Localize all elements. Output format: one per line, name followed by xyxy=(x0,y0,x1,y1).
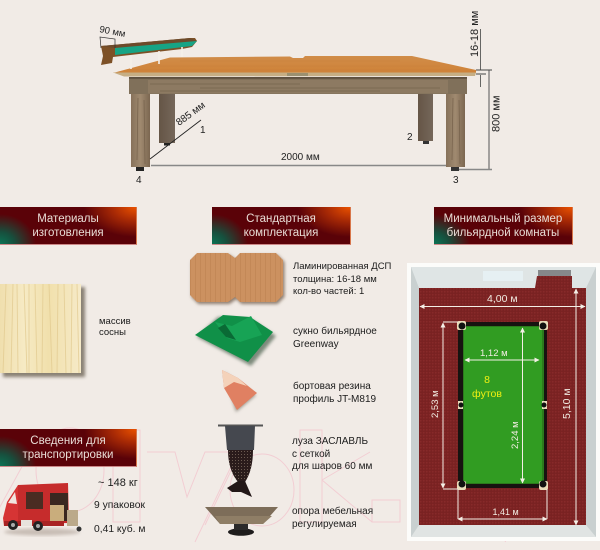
heading: standard kit xyxy=(212,207,351,245)
dimension lines xyxy=(150,29,492,170)
text: foot xyxy=(292,506,373,530)
heading: materials: изготовления xyxy=(32,226,104,238)
text: pine xyxy=(99,316,131,338)
billiard table top view xyxy=(457,321,548,490)
dimension labels: table: 885 мм xyxy=(174,100,208,128)
text: weight: ~ 148 кг xyxy=(98,477,138,489)
dimension labels: table: 2 xyxy=(407,132,413,143)
room dimension labels: 2,24 м xyxy=(510,421,521,449)
dimension labels: table: 1 xyxy=(200,125,206,136)
text: pine: сосны xyxy=(99,327,126,338)
heading: transport: Сведения для xyxy=(30,435,106,447)
text: cloth: Greenway xyxy=(293,338,339,350)
front legs xyxy=(131,94,465,171)
text: packages: 9 упаковок xyxy=(94,500,145,511)
room dimension labels xyxy=(430,293,573,517)
text: cloth xyxy=(293,326,377,350)
text: pocket xyxy=(292,436,372,472)
text: pine: массив xyxy=(99,316,131,327)
icon: delivery truck xyxy=(3,483,82,536)
text: foot: опора мебельная xyxy=(292,506,373,517)
text: rubber: бортовая резина xyxy=(293,381,371,392)
icon: pocket with net xyxy=(218,424,263,497)
text: volume: 0,41 куб. м xyxy=(94,524,146,535)
dimension labels: table xyxy=(136,11,502,186)
table top xyxy=(113,56,476,73)
table size label: футов xyxy=(472,388,502,400)
heading: room size: бильярдной комнаты xyxy=(447,226,559,238)
room dimension labels: 1,12 м xyxy=(480,348,508,359)
icon: green cloth xyxy=(195,315,276,366)
text: pocket: с сеткой xyxy=(292,448,330,460)
dimension labels: table: 3 xyxy=(453,175,459,186)
heading: standard kit: комплектация xyxy=(244,226,318,238)
text: laminated board: Ламинированная ДСП xyxy=(293,261,391,272)
dimension labels: table: 16-18 мм xyxy=(469,11,481,57)
room dimension lines xyxy=(420,289,585,525)
panel image: pine board xyxy=(0,284,85,377)
text: rubber xyxy=(293,381,376,404)
icon: cushion rubber xyxy=(222,370,257,412)
icon: adjustable foot xyxy=(205,507,278,536)
text: rubber: профиль JT-M819 xyxy=(293,394,376,404)
text: cloth: сукно бильярдное xyxy=(293,326,377,337)
text: laminated board xyxy=(293,261,391,297)
heading: transport xyxy=(0,429,137,467)
dimension labels: table: 4 xyxy=(136,175,142,186)
room dimension labels: 4,00 м xyxy=(487,293,518,305)
apron xyxy=(129,77,467,94)
dimension labels: table: 2000 мм xyxy=(281,152,320,163)
billiard table drawing xyxy=(113,56,476,171)
text: pocket: для шаров 60 мм xyxy=(292,461,372,472)
heading: transport: транспортировки xyxy=(22,448,113,460)
heading: room size xyxy=(434,207,573,245)
rail with cloth xyxy=(100,37,197,69)
icon: laminated board xyxy=(190,253,284,304)
label: 90 mm: 90 мм xyxy=(98,24,126,40)
table size label xyxy=(472,374,502,400)
heading: materials: Материалы xyxy=(37,213,99,225)
carpet xyxy=(419,288,586,525)
room dimension labels: 5,10 м xyxy=(561,388,573,419)
room dimension labels: 2,53 м xyxy=(430,390,441,418)
text: foot: регулируемая xyxy=(292,518,357,530)
room dimension labels: 1,41 м xyxy=(492,507,519,517)
table size label: 8 xyxy=(484,374,490,386)
text: laminated board: кол-во частей: 1 xyxy=(293,286,364,297)
text: laminated board: толщина: 16-18 мм xyxy=(293,274,377,284)
room plan xyxy=(407,263,600,541)
watermark xyxy=(0,428,562,542)
heading: room size: Минимальный размер xyxy=(444,213,562,225)
heading: standard kit: Стандартная xyxy=(246,213,316,225)
dimension labels: table: 800 мм xyxy=(490,95,502,132)
text: pocket: луза ЗАСЛАВЛЬ xyxy=(292,436,368,447)
back legs xyxy=(159,94,433,146)
heading: materials xyxy=(0,207,137,245)
